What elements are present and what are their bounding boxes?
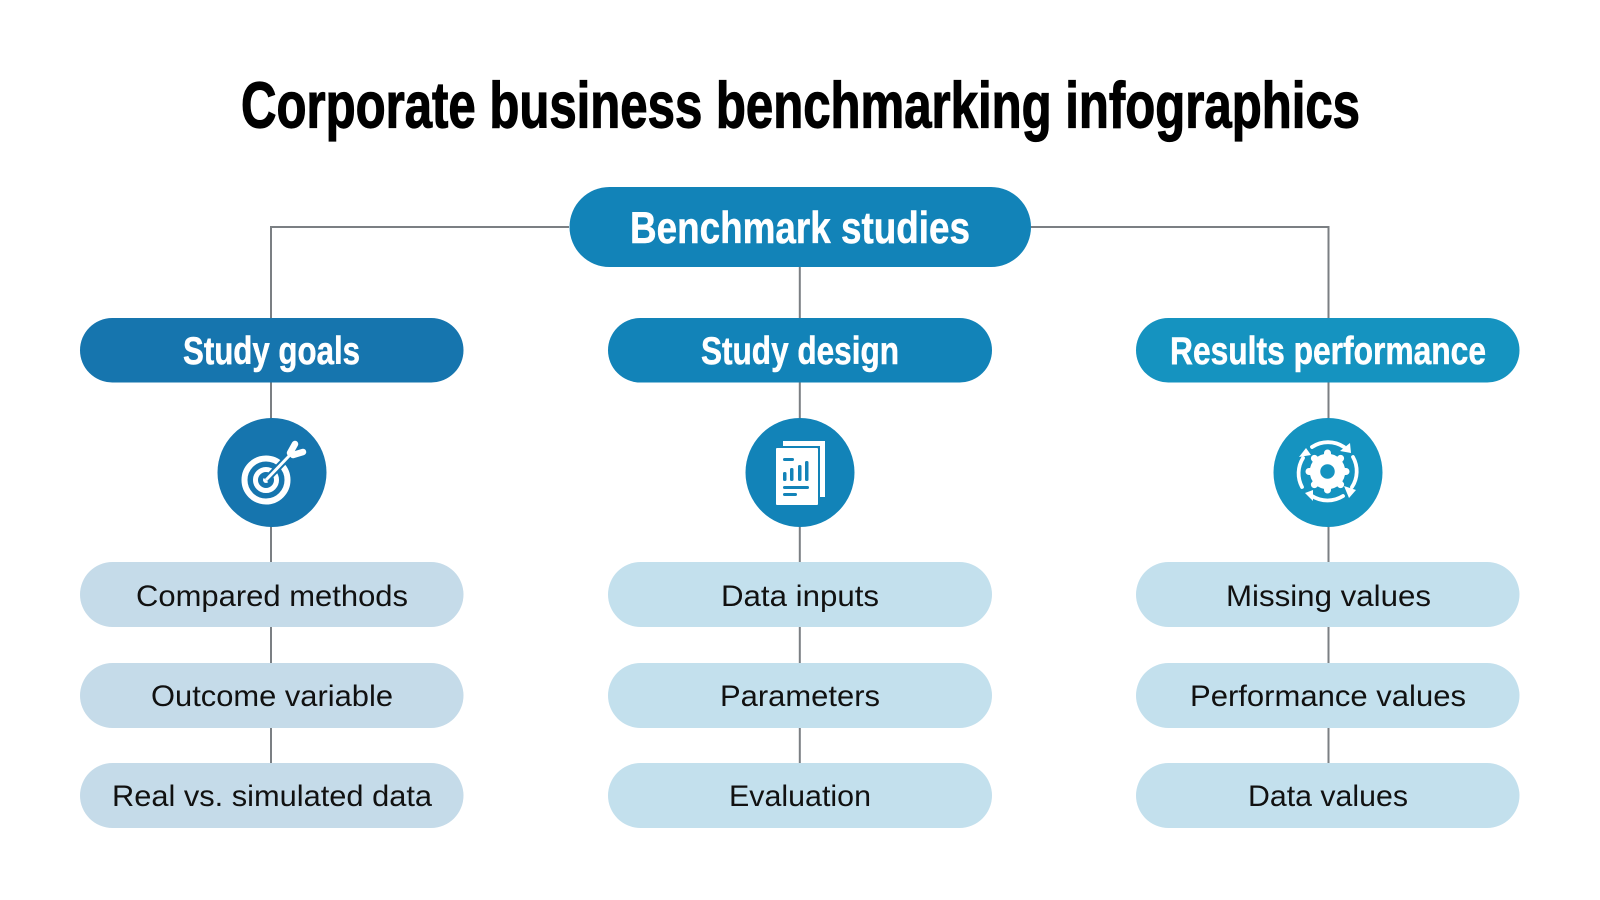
item: Data inputs: Data inputs (721, 580, 879, 613)
item: Parameters: Parameters (720, 680, 880, 713)
icon: report documents with bar chart (746, 418, 854, 527)
column: Study goals (80, 318, 464, 828)
item: Outcome variable: Outcome variable (151, 680, 393, 713)
root node: Benchmark studies (570, 187, 1031, 267)
item: Data inputs (608, 562, 992, 627)
item: Evaluation (608, 763, 992, 828)
heading: Results performance: Results performance (1170, 330, 1486, 373)
item: Performance values (1136, 663, 1520, 728)
item: Real vs. simulated data: Real vs. simulated data (112, 780, 432, 813)
item: Compared methods (80, 562, 464, 627)
column: Study design (608, 318, 992, 828)
item: Data values: Data values (1248, 780, 1408, 813)
heading: Study goals: Study goals (183, 330, 360, 373)
icon: gear with circular arrows (1274, 418, 1382, 527)
item: Performance values: Performance values (1190, 680, 1466, 713)
heading: Study design (608, 318, 992, 382)
item: Parameters (608, 663, 992, 728)
heading: Study design: Study design (701, 330, 899, 373)
item: Real vs. simulated data (80, 763, 464, 828)
item: Compared methods: Compared methods (136, 580, 408, 613)
item: Missing values (1136, 562, 1520, 627)
root node: Benchmark studies: Benchmark studies (630, 204, 970, 253)
item: Missing values: Missing values (1226, 580, 1431, 613)
item: Outcome variable (80, 663, 464, 728)
heading: Study goals (80, 318, 464, 382)
item: Data values (1136, 763, 1520, 828)
column: Results performance (1136, 318, 1520, 828)
item: Evaluation: Evaluation (729, 780, 871, 813)
heading: Results performance (1136, 318, 1520, 382)
icon: target with dart (218, 418, 326, 527)
